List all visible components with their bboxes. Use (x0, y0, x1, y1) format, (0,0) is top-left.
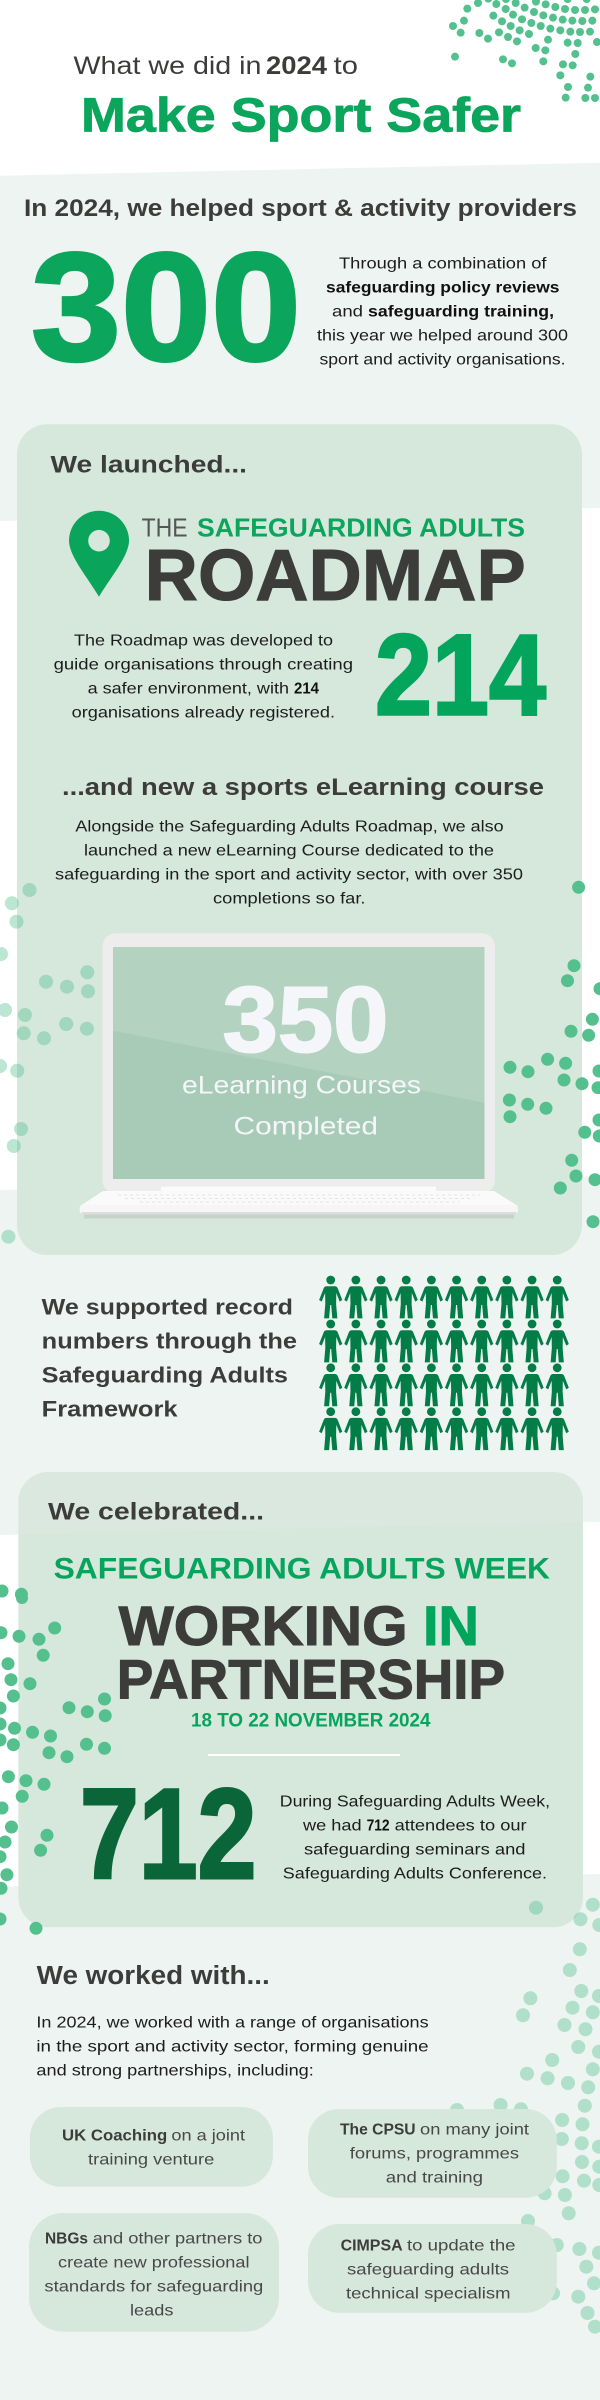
label: elearning courses completed: eLearning Courses (182, 1071, 421, 1099)
card: nbgs: create new professional (58, 2255, 249, 2272)
card: nbgs: standards for safeguarding (44, 2279, 263, 2296)
panel: we launched (17, 424, 582, 1255)
card: uk coaching: on a joint (171, 2128, 246, 2145)
campaign title: working in partnership (117, 1594, 505, 1711)
date: 18 to 22 november 2024: 18 TO 22 NOVEMBER 2024 (191, 1710, 431, 1732)
text block: record numbers: numbers through the (42, 1329, 297, 1354)
text block: record numbers: Framework (42, 1397, 178, 1422)
card: the cpsu: forums, programmes (350, 2146, 519, 2163)
text block: partnerships intro (36, 2014, 429, 2079)
text block: 300 description: safeguarding policy reviews (326, 279, 560, 296)
card: cimpsa: safeguarding adults (347, 2262, 509, 2279)
text block: 712 description: During Safeguarding Adults Week, (280, 1794, 550, 1811)
icon: map pin (69, 511, 129, 597)
card: cimpsa: technical specialism (346, 2286, 510, 2303)
laptop illustration (80, 933, 518, 1218)
text block: partnerships intro: In 2024, we worked with a range of organisations (36, 2014, 429, 2031)
panel: we celebrated (18, 1472, 583, 1927)
card: uk coaching: UK Coaching (62, 2128, 167, 2145)
campaign title: working in partnership: IN (423, 1594, 479, 1657)
title: 2024 (266, 52, 327, 80)
text block: elearning description: safeguarding in the sport and activity sector, with over 350 (55, 867, 523, 884)
heading: safeguarding adults week: SAFEGUARDING ADULTS WEEK (54, 1552, 550, 1585)
text block: elearning description: launched a new eLearning Course dedicated to the (84, 843, 494, 860)
big number 712: 712 (80, 1763, 256, 1906)
text block: 712 description (280, 1794, 550, 1883)
title: What we did in (74, 52, 262, 80)
card: uk coaching: training venture (88, 2152, 214, 2169)
text block: 300 description: Through a combination of (339, 255, 547, 272)
text block: 712 description: 712 (367, 1818, 390, 1835)
decorative dots: left and right edge, solid (0, 881, 600, 1935)
card: the cpsu (308, 2109, 557, 2198)
text block: record numbers (42, 1295, 297, 1422)
heading: helped providers: In 2024, we helped sport & activity providers (24, 195, 577, 222)
text block: roadmap description: guide organisations through creating (54, 656, 353, 673)
card: the cpsu: and training (386, 2170, 483, 2187)
logo: safeguarding adults roadmap: ROADMAP (145, 536, 526, 616)
text block: 300 description (317, 255, 568, 368)
card: cimpsa (308, 2224, 557, 2313)
decorative dots: top right (449, 0, 600, 102)
card: nbgs: NBGs (45, 2231, 88, 2248)
card: nbgs (29, 2213, 279, 2332)
card: cimpsa: CIMPSA (341, 2238, 403, 2255)
heading: we launched: We launched... (50, 452, 247, 479)
text block: roadmap description: 214 (294, 680, 319, 697)
campaign title: working in partnership: WORKING (119, 1594, 408, 1657)
card: cimpsa: to update the (407, 2238, 516, 2255)
text block: record numbers: Safeguarding Adults (42, 1363, 288, 1388)
text block: record numbers: We supported record (42, 1295, 293, 1320)
text block: roadmap description: a safer environment, with (88, 680, 289, 697)
label: elearning courses completed (182, 1071, 421, 1140)
card: nbgs: and other partners to (93, 2231, 263, 2248)
text block: 300 description: sport and activity organisations. (320, 351, 566, 368)
text block: 300 description: this year we helped around 300 (317, 327, 568, 344)
heading: elearning course: ...and new a sports eLearning course (62, 774, 544, 801)
text block: 712 description: Safeguarding Adults Conference. (283, 1866, 547, 1883)
text block: elearning description: completions so far. (213, 891, 366, 908)
heading: we worked with: We worked with... (37, 1962, 270, 1990)
title: Make Sport Safer (81, 90, 521, 143)
text block: roadmap description (54, 632, 353, 721)
title (74, 52, 521, 143)
logo: safeguarding adults roadmap: THE (142, 513, 188, 543)
text block: roadmap description: The Roadmap was developed to (74, 632, 333, 649)
heading: we celebrated: We celebrated... (48, 1498, 264, 1525)
decorative dots: left and right edge, faded (0, 883, 600, 2334)
text block: 712 description: we had (302, 1818, 362, 1835)
text block: roadmap description: organisations already registered. (72, 704, 335, 721)
big number 350: 350 (223, 968, 388, 1072)
text block: partnerships intro: in the sport and activity sector, forming genuine (36, 2038, 429, 2055)
logo: safeguarding adults roadmap: SAFEGUARDING ADULTS (197, 513, 525, 543)
card: nbgs: leads (130, 2303, 173, 2320)
big number 300: 300 (31, 221, 301, 393)
title: to (334, 52, 358, 80)
card: the cpsu: The CPSU (340, 2122, 416, 2139)
text block: 712 description: attendees to our (395, 1818, 527, 1835)
campaign title: working in partnership: PARTNERSHIP (117, 1648, 505, 1711)
text block: elearning description (55, 819, 523, 908)
text block: elearning description: Alongside the Safeguarding Adults Roadmap, we also (75, 819, 504, 836)
text block: 300 description: and (332, 303, 363, 320)
card: uk coaching (30, 2107, 273, 2187)
text block: 712 description: safeguarding seminars and (304, 1842, 526, 1859)
chart: grid of people icons (319, 1276, 569, 1450)
card: the cpsu: on many joint (420, 2122, 530, 2139)
text block: partnerships intro: and strong partnerships, including: (36, 2062, 314, 2079)
big number 214: 214 (375, 612, 546, 740)
text block: 300 description: safeguarding training, (368, 303, 554, 320)
label: elearning courses completed: Completed (234, 1112, 378, 1140)
